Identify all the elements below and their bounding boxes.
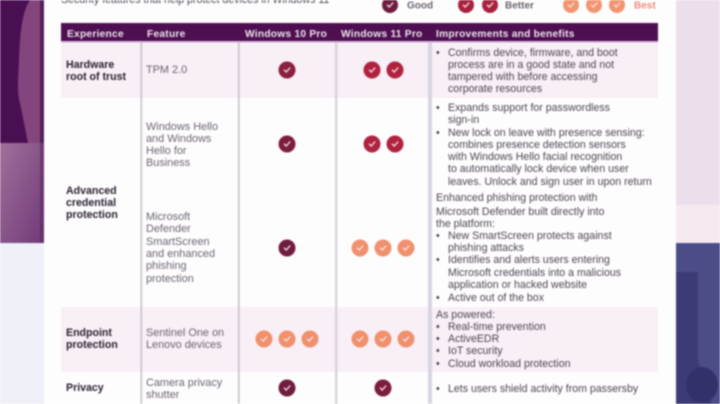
legend: best: Best [634, 0, 656, 12]
improvements and benefits text: Active out of the box [448, 292, 545, 304]
feature labels: Microsoft [146, 211, 190, 223]
improvements and benefits text: • [436, 292, 440, 304]
improvements and benefits text: New lock on leave with presence sensing: [448, 127, 645, 139]
improvements and benefits text: Enhanced phishing protection with [436, 192, 597, 204]
improvements and benefits text: • [436, 345, 440, 357]
feature labels: protection [146, 273, 194, 285]
improvements and benefits text: ActiveEDR [448, 333, 500, 345]
experience labels: Hardware [66, 59, 114, 71]
table header: Improvements and benefits [436, 29, 575, 40]
feature labels: SmartScreen [146, 236, 210, 248]
improvements and benefits text: • [436, 230, 440, 242]
panel: left photo strip [0, 0, 44, 404]
legend: better [458, 0, 534, 13]
table [61, 23, 658, 404]
feature labels: and Windows [146, 133, 212, 145]
feature labels: shutter [146, 389, 180, 401]
improvements and benefits text: Cloud workload protection [448, 358, 571, 370]
improvements and benefits text: combines presence detection sensors [448, 139, 626, 151]
table header: Windows 10 Pro [245, 29, 327, 40]
legend: better: Better [505, 0, 534, 12]
experience labels: Endpoint [66, 327, 112, 339]
improvements and benefits text: with Windows Hello facial recognition [447, 151, 622, 163]
improvements and benefits text: Confirms device, firmware, and boot [448, 47, 618, 59]
improvements and benefits text: the platform: [436, 218, 495, 230]
improvements and benefits text: • [436, 383, 440, 395]
table header: Experience [67, 29, 124, 40]
improvements and benefits text: tampered with before accessing [448, 71, 598, 83]
improvements and benefits text: Microsoft Defender built directly into [436, 206, 605, 218]
feature labels: phishing [146, 260, 187, 272]
improvements and benefits text: phishing attacks [448, 242, 524, 254]
experience labels: credential [66, 197, 116, 209]
feature labels: Hello for [146, 145, 187, 157]
improvements and benefits text: New SmartScreen protects against [448, 230, 612, 242]
feature labels: Business [146, 157, 191, 169]
legend: best [563, 0, 656, 13]
feature labels: Camera privacy [146, 377, 223, 389]
improvements and benefits text [436, 47, 652, 395]
panel: right photo strip [676, 0, 720, 404]
experience labels: protection [66, 209, 118, 221]
improvements and benefits text: • [436, 102, 440, 114]
improvements and benefits text: Identifies and alerts users entering [448, 254, 610, 266]
improvements and benefits text: process are in a good state and not [448, 59, 614, 71]
improvements and benefits text: • [436, 47, 440, 59]
ratings: Windows 10 Pro [256, 62, 318, 396]
improvements and benefits text: • [436, 321, 440, 333]
legend: good: Good [407, 0, 433, 12]
improvements and benefits text: Real-time prevention [448, 321, 546, 333]
legend [382, 0, 656, 13]
improvements and benefits text: Microsoft credentials into a malicious [448, 267, 621, 279]
improvements and benefits text: Expands support for passwordless [448, 102, 610, 114]
table header: Windows 11 Pro [341, 29, 423, 40]
feature labels: Lenovo devices [146, 339, 222, 351]
feature labels: TPM 2.0 [146, 64, 187, 76]
row background: endpoint protection [61, 307, 658, 372]
row background: hardware root of trust [61, 44, 658, 98]
feature labels: and enhanced [146, 248, 215, 260]
improvements and benefits text: • [436, 358, 440, 370]
improvements and benefits text: • [436, 333, 440, 345]
feature labels: Defender [146, 223, 191, 235]
improvements and benefits text: • [436, 254, 440, 266]
improvements and benefits text: • [436, 127, 440, 139]
feature labels: Sentinel One on [146, 327, 224, 339]
experience labels: root of trust [66, 71, 126, 83]
improvements and benefits text: IoT security [448, 345, 503, 357]
experience labels [66, 59, 126, 394]
improvements and benefits text: sign-in [448, 114, 479, 126]
feature labels: Windows Hello [146, 121, 218, 133]
legend: good [382, 0, 433, 13]
table header: Feature [147, 29, 186, 40]
improvements and benefits text: As powered: [436, 309, 495, 321]
ratings: Windows 11 Pro [352, 62, 414, 396]
improvements and benefits text: application or hacked website [448, 279, 587, 291]
improvements and benefits text: corporate resources [448, 83, 542, 95]
improvements and benefits text: to automatically lock device when user [448, 163, 629, 175]
table header [61, 23, 658, 43]
experience labels: Privacy [66, 382, 104, 394]
experience labels: Advanced [66, 185, 117, 197]
feature labels [146, 64, 224, 401]
experience labels: protection [66, 339, 118, 351]
improvements and benefits text: leaves. Unlock and sign user in upon return [448, 176, 652, 188]
improvements and benefits text: Lets users shield activity from passersby [448, 383, 639, 395]
